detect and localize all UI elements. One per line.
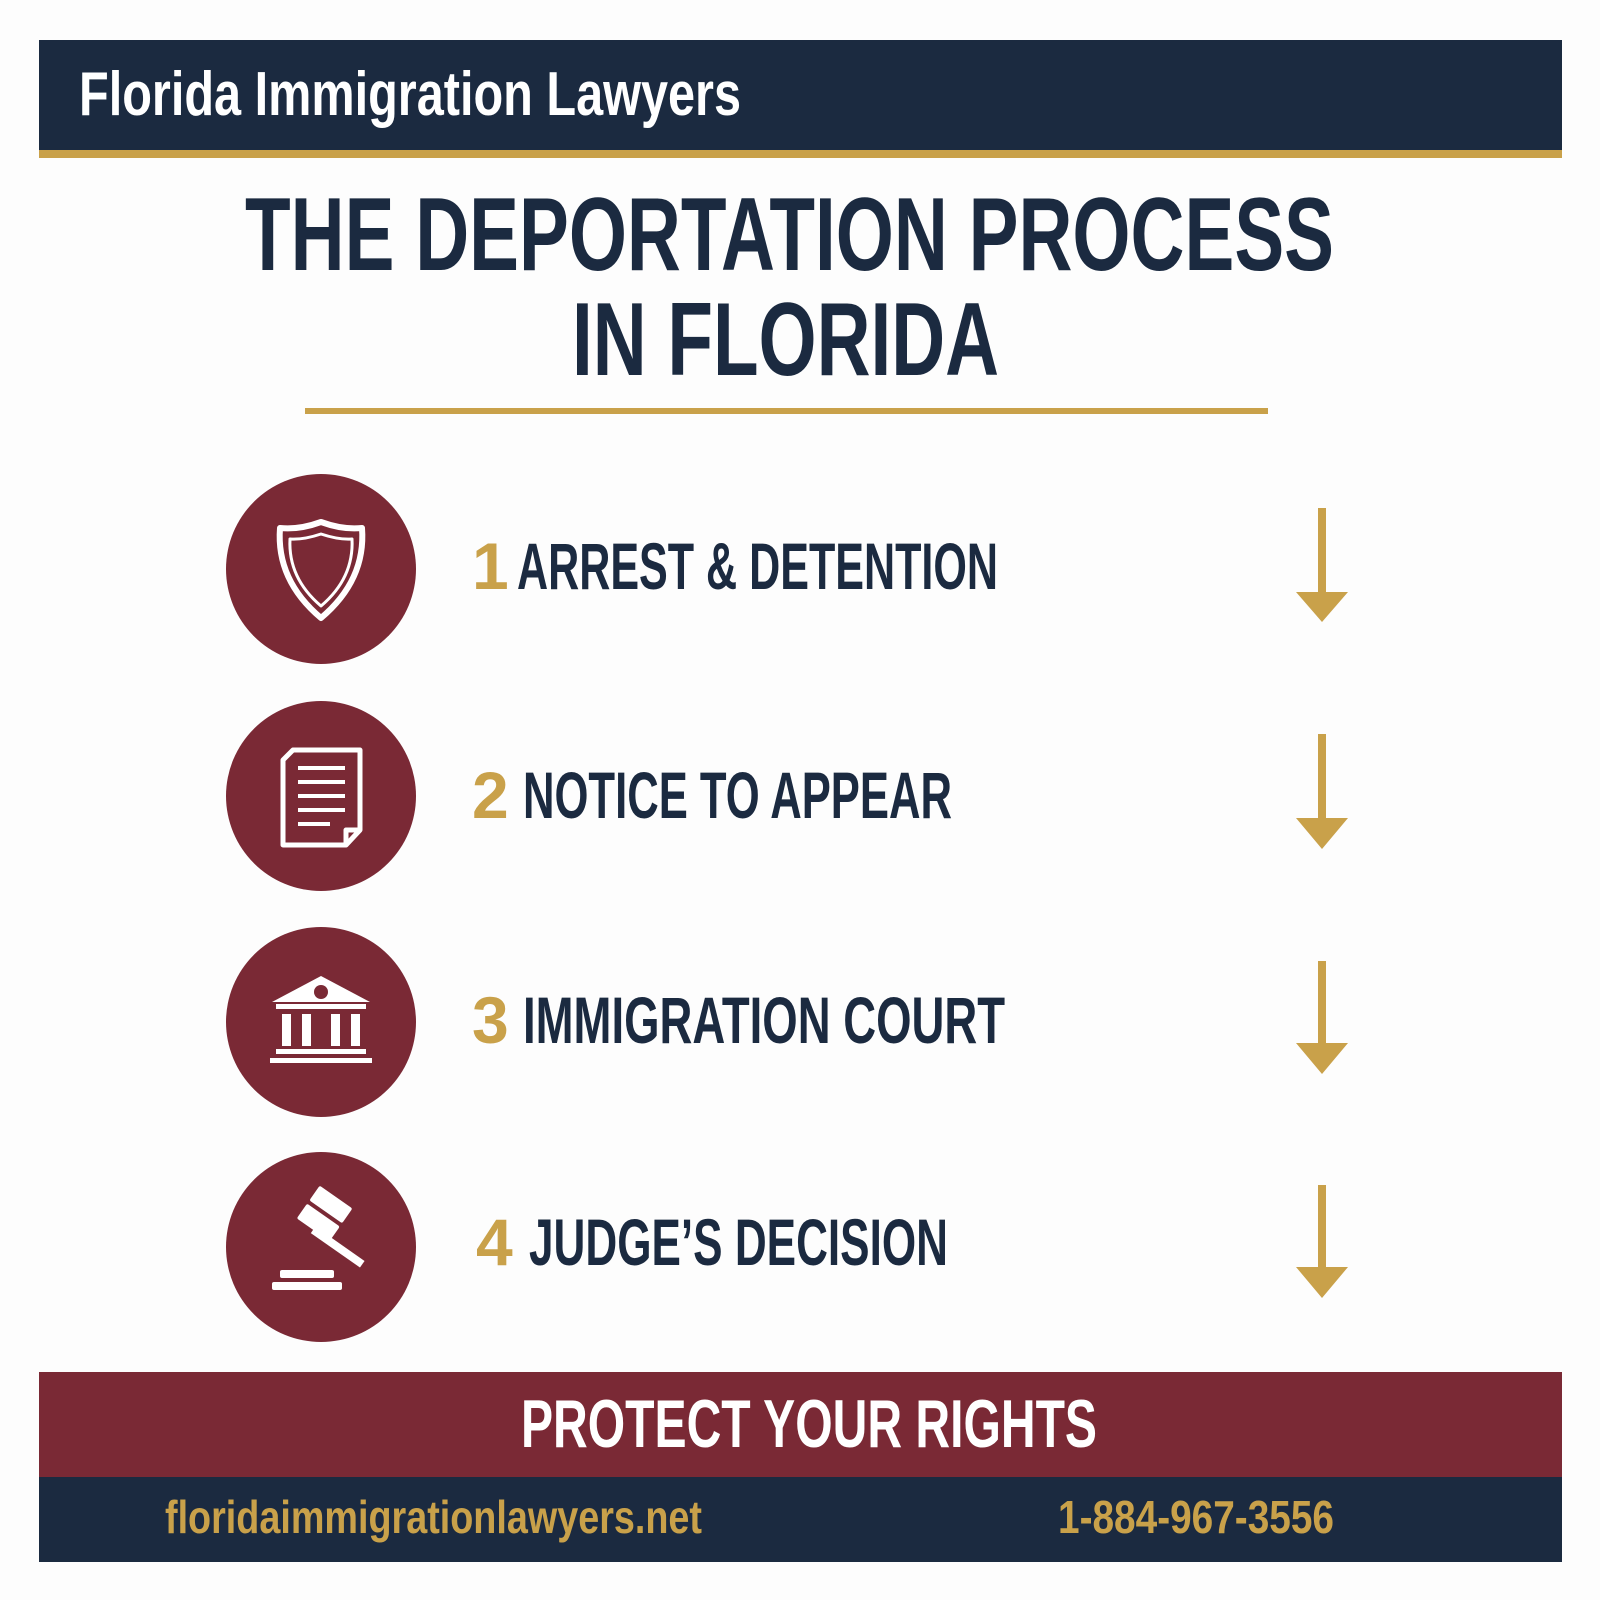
step 3: immigration court [226,927,1005,1117]
footer contact bar [39,1477,1562,1562]
icon: gavel [272,1186,385,1290]
step 4: judge's decision: JUDGE’S DECISION [529,1205,948,1279]
step 2: notice to appear: 2 [472,758,509,832]
banner: protect your rights: PROTECT YOUR RIGHTS [521,1386,1097,1462]
title underline [305,408,1268,414]
header bar: Florida Immigration Lawyers [79,60,741,129]
arrow 3 [1296,961,1348,1074]
step 3: immigration court: IMMIGRATION COURT [523,983,1005,1057]
step 1: arrest & detention [226,474,998,664]
header bar [39,40,1562,158]
icon: courthouse [270,976,372,1063]
step 3: immigration court: 3 [472,983,509,1057]
arrow 4 [1296,1185,1348,1298]
step 1: arrest & detention: ARREST & DETENTION [517,529,998,603]
step 2: notice to appear [226,701,952,891]
title: IN FLORIDA [572,282,999,398]
step 2: notice to appear: NOTICE TO APPEAR [523,758,952,832]
banner: protect your rights [39,1372,1562,1478]
arrow 2 [1296,734,1348,849]
step 4: judge's decision [226,1152,948,1342]
step 1: arrest & detention: 1 [472,529,509,603]
title [245,177,1334,398]
step 4: judge's decision: 4 [476,1205,513,1279]
icon: document [283,750,360,845]
arrow 1 [1296,508,1348,622]
footer contact bar: floridaimmigrationlawyers.net [165,1491,702,1543]
icon: shield [280,522,362,618]
footer contact bar: 1-884-967-3556 [1058,1491,1334,1543]
